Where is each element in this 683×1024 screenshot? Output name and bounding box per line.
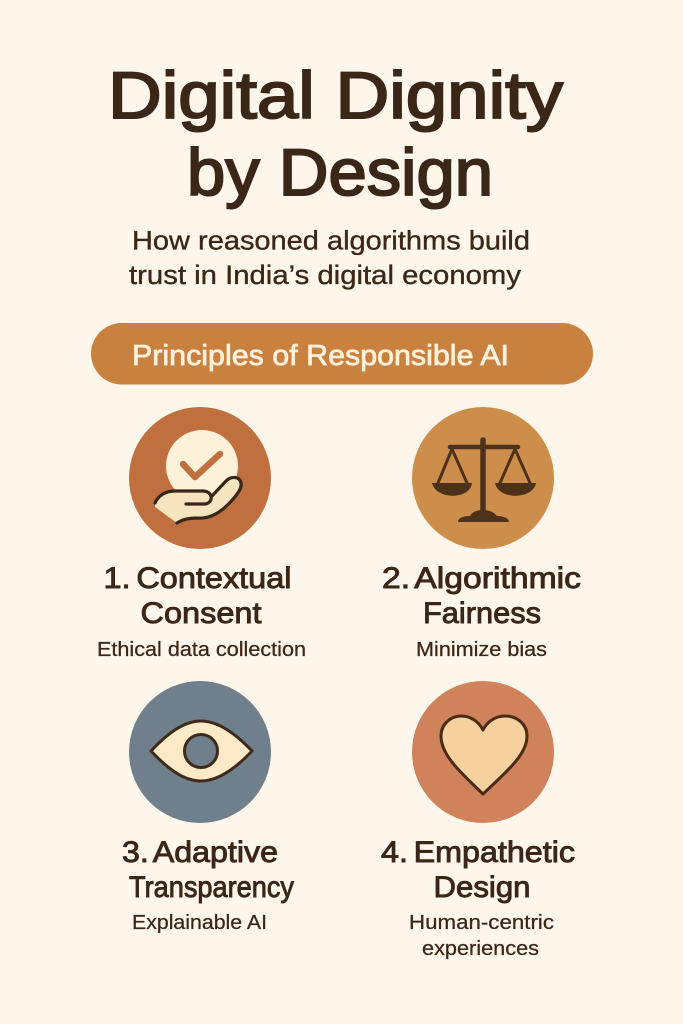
subtitle: trust in India’s digital economy (129, 260, 522, 290)
panel: contextual consent (97, 407, 306, 661)
heading: 2. Algorithmic (382, 562, 581, 595)
panel: empathetic design (381, 681, 575, 960)
heading: Fairness (423, 597, 541, 630)
description: Ethical data collection (97, 639, 306, 661)
heading (104, 562, 292, 630)
heading: Consent (140, 597, 262, 630)
section banner: Principles of Responsible AI (132, 340, 509, 372)
description (409, 912, 554, 960)
panel: algorithmic fairness (382, 407, 581, 661)
heading: Transparency (129, 871, 294, 904)
title: Digital Dignity (108, 58, 563, 132)
icon: eye (129, 681, 271, 823)
panel: adaptive transparency (122, 681, 294, 934)
icon: balance scales (412, 407, 554, 549)
description: Minimize bias (416, 639, 547, 661)
heading (382, 562, 581, 630)
heading: 3. Adaptive (122, 836, 278, 869)
subtitle (129, 226, 530, 290)
section banner (91, 323, 593, 384)
heading: 4. Empathetic (381, 836, 575, 869)
title: by Design (187, 135, 493, 209)
description: experiences (422, 938, 539, 960)
description: Explainable AI (132, 912, 267, 934)
heading (122, 836, 294, 904)
heading: 1. Contextual (104, 562, 292, 595)
icon: hand holding check (129, 407, 271, 549)
icon: heart (412, 681, 554, 823)
subtitle: How reasoned algorithms build (132, 226, 530, 256)
heading (381, 836, 575, 904)
heading: Design (434, 871, 530, 904)
description: Human-centric (409, 912, 554, 934)
title (108, 58, 563, 209)
